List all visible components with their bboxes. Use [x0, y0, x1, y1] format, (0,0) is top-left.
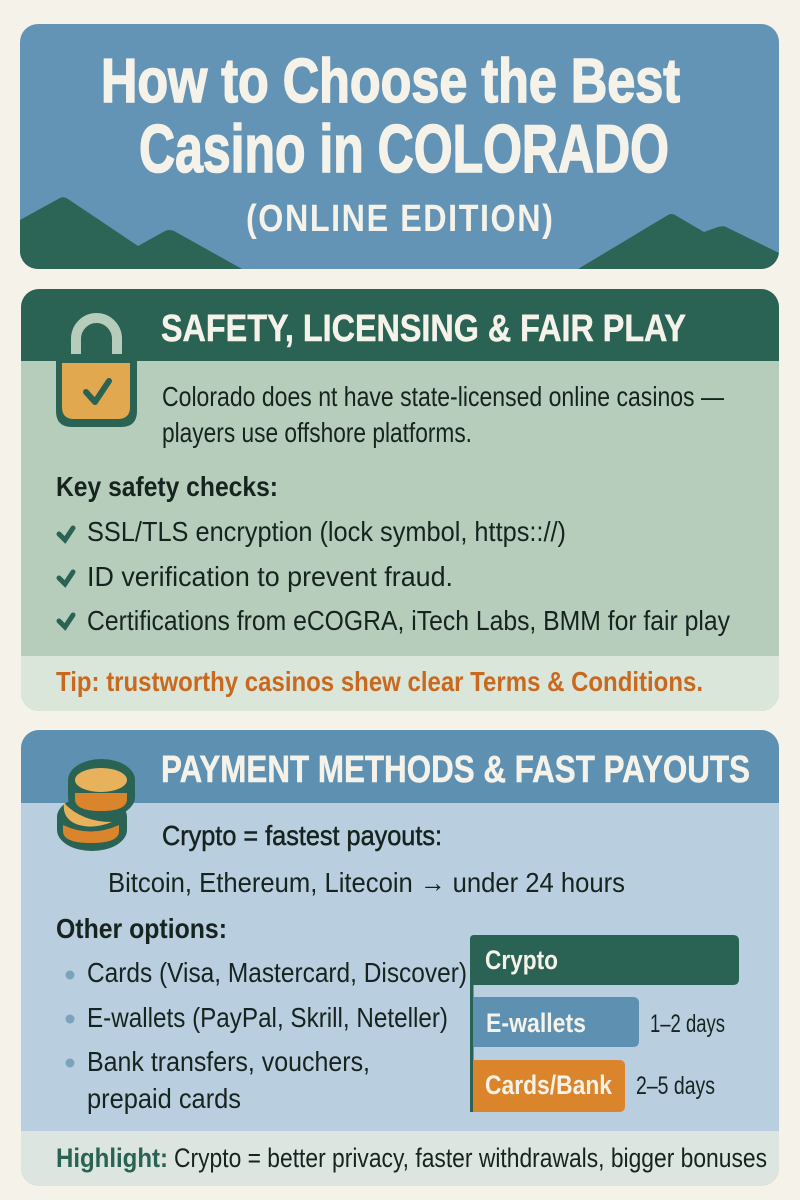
- subheading: key safety checks: Key safety checks:: [56, 471, 278, 502]
- tip: Tip: trustworthy casinos shew clear Terms & Conditions.: [56, 666, 703, 697]
- bar: e-wallets: 1–2 days: [650, 1010, 725, 1038]
- bar: cards/bank: Cards/Bank: [485, 1070, 613, 1100]
- title: (ONLINE EDITION): [246, 198, 553, 240]
- intro text: players use offshore platforms.: [162, 417, 472, 448]
- checklist: [59, 516, 730, 636]
- option: bank transfers: Bank transfers, vouchers,: [87, 1046, 370, 1077]
- heading: safety: SAFETY, LICENSING & FAIR PLAY: [161, 308, 686, 350]
- bar: crypto: [470, 935, 739, 985]
- check item: certifications: Certifications from eCOGRA, iTech Labs, BMM for fair play: [87, 605, 730, 636]
- bar: cards/bank: [473, 1060, 715, 1112]
- option: e-wallets: E-wallets (PayPal, Skrill, Neteller): [87, 1002, 448, 1033]
- subheading: other options: Other options:: [56, 913, 227, 944]
- highlight: Highlight:: [56, 1143, 168, 1173]
- intro text: [162, 381, 724, 448]
- panel: payment methods and fast payouts: [21, 730, 779, 1186]
- icon: coin stack: [57, 759, 135, 851]
- option: cards: Cards (Visa, Mastercard, Discover): [87, 957, 467, 988]
- option: bank transfers: prepaid cards: [87, 1083, 241, 1114]
- bar: e-wallets: [473, 997, 725, 1047]
- option: bank transfers: [66, 1046, 370, 1114]
- payment options list: [66, 957, 467, 1114]
- panel: safety, licensing and fair play: [21, 289, 779, 711]
- crypto text: Crypto = fastest payouts:: [162, 820, 442, 851]
- title: How to Choose the Best: [101, 47, 680, 116]
- check item: id verification: ID verification to prevent fraud.: [87, 561, 453, 592]
- title: [101, 47, 680, 240]
- mountains left and right: [20, 197, 779, 269]
- bar: crypto: Crypto: [485, 945, 558, 975]
- header banner: [20, 24, 779, 269]
- icon: padlock with check: [56, 318, 137, 427]
- bar: cards/bank: 2–5 days: [636, 1072, 715, 1100]
- bar chart: payout speed: [470, 935, 739, 1112]
- crypto text: Bitcoin, Ethereum, Litecoin → under 24 hours: [108, 867, 625, 898]
- bar: e-wallets: E-wallets: [486, 1008, 586, 1038]
- check item: encryption: SSL/TLS encryption (lock symbol, https:://): [87, 516, 566, 547]
- crypto text: [108, 820, 625, 898]
